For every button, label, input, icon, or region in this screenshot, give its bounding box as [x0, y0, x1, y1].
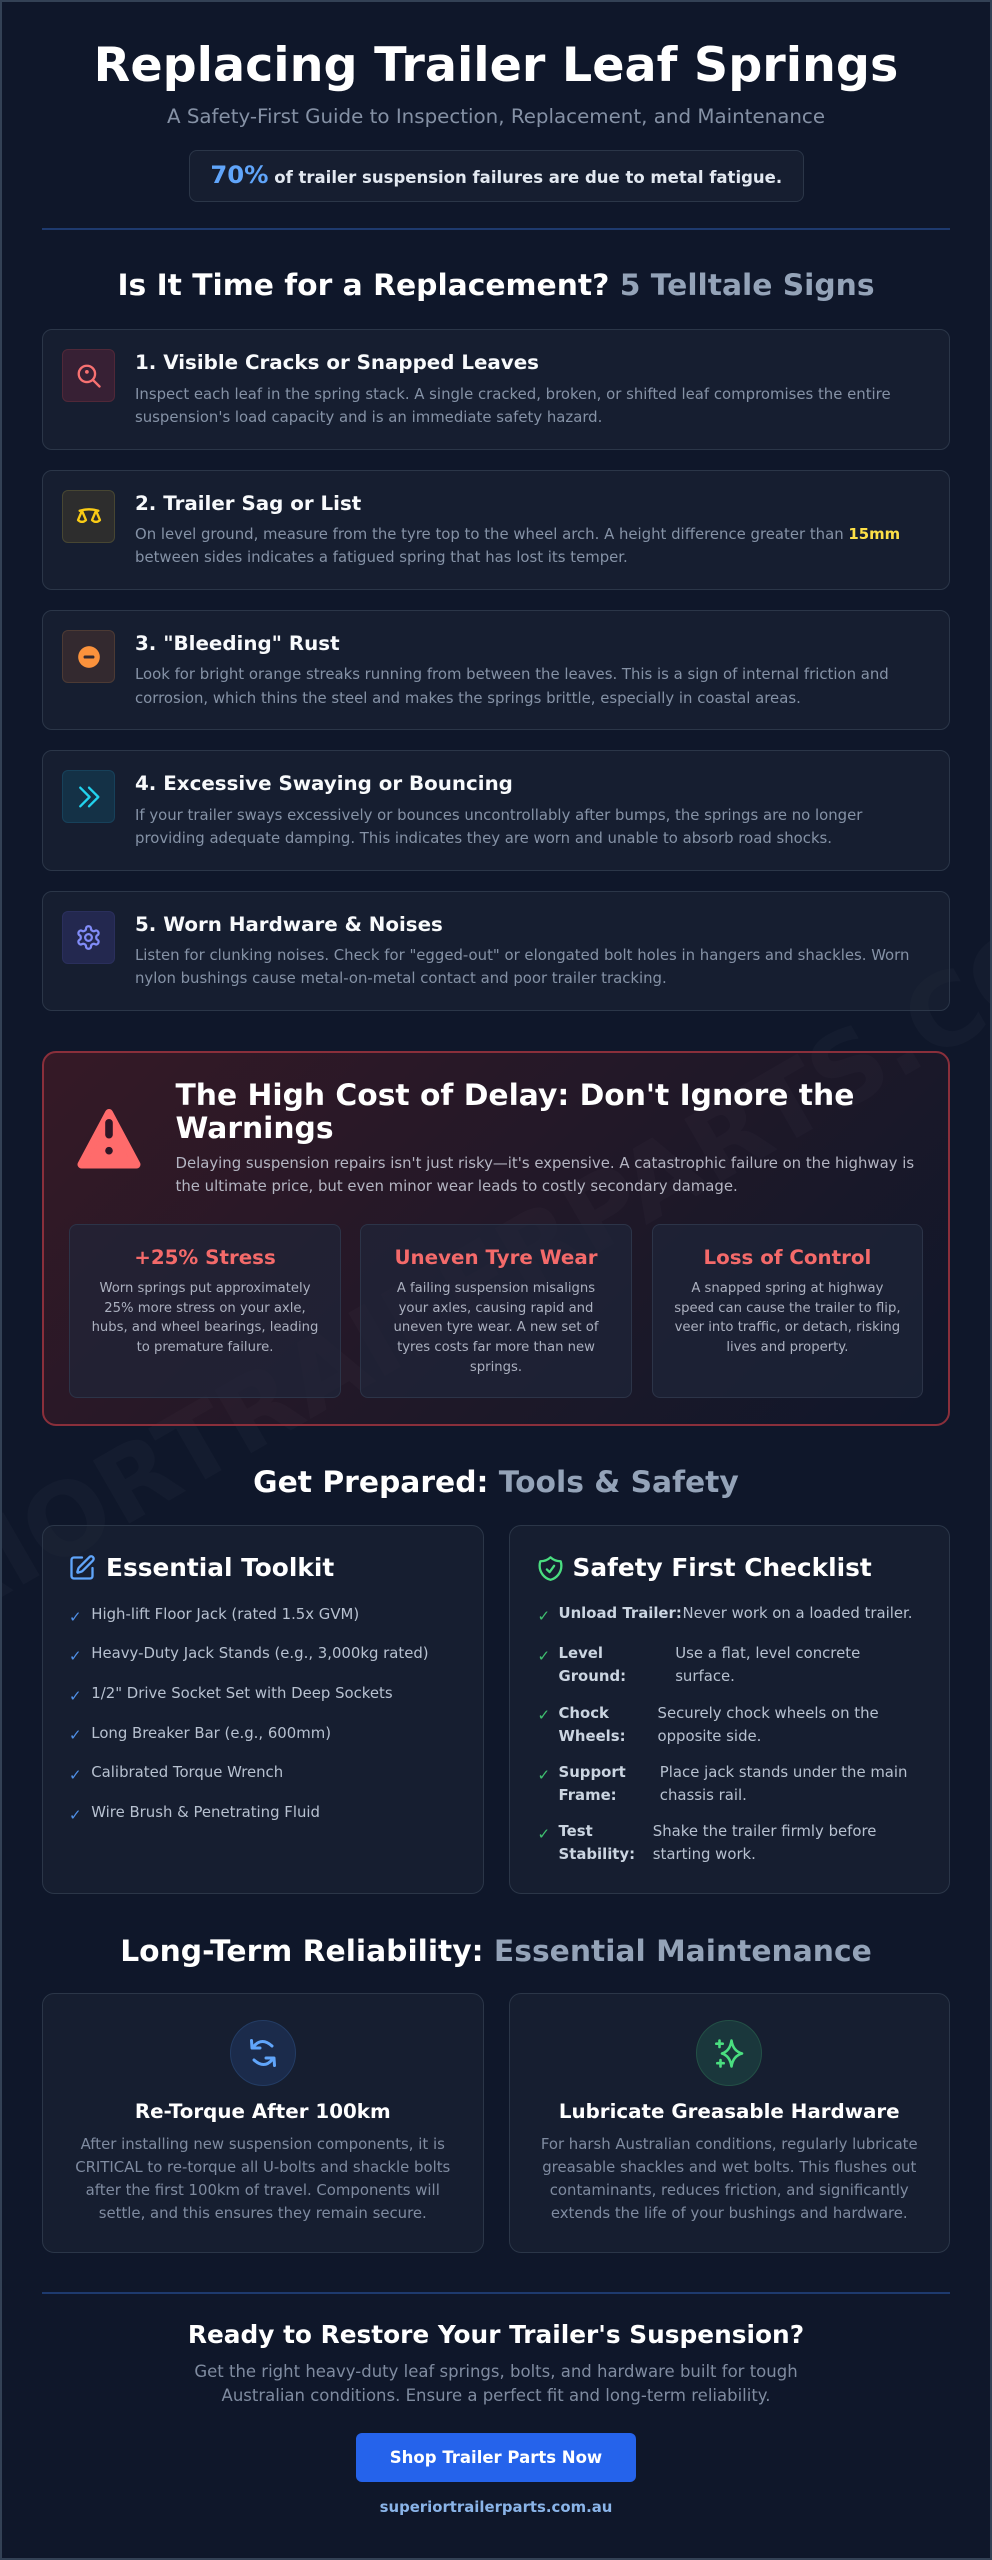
checklist: surface.	[675, 1667, 735, 1685]
panel: re-torque	[42, 1993, 484, 2253]
panel description	[176, 1154, 914, 1195]
card text: CRITICAL to re-torque all U-bolts and shackle bolts	[75, 2158, 450, 2176]
checklist: opposite side.	[658, 1727, 761, 1745]
toolkit list: 1/2" Drive Socket Set with Deep Sockets	[91, 1684, 393, 1702]
toolkit list: Calibrated Torque Wrench	[91, 1763, 283, 1781]
sign title: 4. Excessive Swaying or Bouncing	[135, 772, 513, 795]
card text	[541, 2135, 918, 2222]
heading: maintenance: Long-Term Reliability: Essential Maintenance	[120, 1934, 872, 1969]
card text: after the first 100km of travel. Components will	[86, 2181, 440, 2199]
sign 3	[42, 610, 950, 730]
sign description: nylon bushings cause metal-on-metal contact and poor trailer tracking.	[135, 969, 667, 987]
sign description: corrosion, which thins the steel and makes the springs brittle, especially in coastal areas.	[135, 689, 801, 707]
sign description: Inspect each leaf in the spring stack. A single cracked, broken, or shifted leaf compromises the entire	[135, 385, 891, 403]
icon: magnifier	[62, 349, 115, 402]
sign description	[135, 385, 891, 426]
sign description	[135, 946, 909, 987]
consequence: tyre wear	[360, 1224, 632, 1398]
checklist: Shake the trailer firmly before	[653, 1822, 876, 1840]
sign 4	[42, 750, 950, 871]
call to action	[188, 2320, 804, 2516]
consequence text: tyres costs far more than new	[397, 1340, 595, 1355]
card text: settle, and this ensures they remain secure.	[99, 2204, 427, 2222]
checklist: chassis rail.	[660, 1786, 747, 1804]
card text: greasable shackles and wet bolts. This flushes out	[542, 2158, 916, 2176]
sign title: 3. "Bleeding" Rust	[135, 632, 340, 655]
consequence title: Uneven Tyre Wear	[394, 1246, 598, 1269]
panel description: the ultimate price, but even minor wear leads to costly secondary damage.	[176, 1177, 738, 1195]
toolkit list: ✓	[69, 1806, 82, 1824]
checklist: Place jack stands under the main	[660, 1763, 908, 1781]
sign description: between sides indicates a fatigued spring that has lost its temper.	[135, 548, 628, 566]
sign description: Look for bright orange streaks running from between the leaves. This is a sign of internal friction and	[135, 665, 889, 683]
sign description	[135, 665, 889, 707]
sign description: suspension's load capacity and is an immediate safety hazard.	[135, 408, 602, 426]
sign description: Listen for clunking noises. Check for "egged-out" or elongated bolt holes in hangers and shackles. Worn	[135, 946, 909, 964]
consequence title: Loss of Control	[703, 1246, 871, 1269]
panel: high cost of delay	[42, 1051, 950, 1426]
consequence text: to premature failure.	[137, 1340, 273, 1355]
cta text: Get the right heavy-duty leaf springs, bolts, and hardware built for tough	[194, 2362, 798, 2381]
panel heading: The High Cost of Delay: Don't Ignore the	[176, 1078, 854, 1113]
consequence text: 25% more stress on your axle,	[104, 1301, 306, 1316]
toolkit list: Wire Brush & Penetrating Fluid	[91, 1803, 320, 1821]
toolkit list	[69, 1605, 429, 1824]
sign description: On level ground, measure from the tyre top to the wheel arch. A height difference greater than 15mm	[135, 525, 900, 543]
icon: gear	[62, 911, 115, 964]
card text: extends the life of your bushings and hardware.	[551, 2204, 908, 2222]
checklist: Securely chock wheels on the	[658, 1704, 879, 1722]
card text: For harsh Australian conditions, regularly lubricate	[541, 2135, 918, 2153]
panel: essential toolkit	[42, 1525, 484, 1894]
panel heading: Warnings	[176, 1111, 334, 1146]
checklist: ✓	[538, 1706, 550, 1724]
icon: shield check	[538, 1556, 562, 1581]
checklist: Use a flat, level concrete	[675, 1644, 860, 1662]
consequence text: uneven tyre wear. A new set of	[393, 1320, 598, 1335]
panel description: Delaying suspension repairs isn't just risky—it's expensive. A catastrophic failure on the highway is	[176, 1154, 914, 1172]
checklist: Ground:	[558, 1667, 626, 1685]
button	[356, 2433, 636, 2482]
toolkit list: ✓	[69, 1608, 82, 1626]
panel: safety checklist	[508, 1525, 950, 1894]
consequence text: your axles, causing rapid and	[399, 1301, 593, 1316]
consequence text: A snapped spring at highway	[691, 1281, 883, 1296]
sign 2	[42, 470, 950, 590]
checklist: Support	[558, 1763, 626, 1781]
consequence text: Worn springs put approximately	[99, 1281, 311, 1296]
sign description	[135, 525, 900, 566]
icon: sparkles	[696, 2020, 762, 2086]
toolkit list: ✓	[69, 1647, 82, 1665]
toolkit list: Long Breaker Bar (e.g., 600mm)	[91, 1724, 331, 1742]
checklist: Level	[558, 1644, 603, 1662]
toolkit list: High-lift Floor Jack (rated 1.5x GVM)	[91, 1605, 359, 1623]
heading: tools and safety: Get Prepared: Tools & Safety	[253, 1465, 739, 1500]
toolkit list: Heavy-Duty Jack Stands (e.g., 3,000kg rated)	[91, 1644, 429, 1662]
checklist: Test	[558, 1822, 593, 1840]
icon: scales	[62, 490, 115, 543]
checklist heading: Safety First Checklist	[572, 1553, 872, 1582]
toolkit list: ✓	[69, 1766, 82, 1784]
sign description: If your trailer sways excessively or bounces uncontrollably after bumps, the springs are no longer	[135, 806, 862, 824]
checklist: Chock	[558, 1704, 609, 1722]
checklist: ✓	[538, 1607, 550, 1625]
sign 5	[42, 891, 950, 1011]
consequence text: speed can cause the trailer to flip,	[674, 1301, 901, 1316]
icon: warning triangle	[78, 1109, 140, 1168]
sign title: 2. Trailer Sag or List	[135, 492, 361, 515]
checklist: Stability:	[558, 1845, 635, 1863]
sign title: 1. Visible Cracks or Snapped Leaves	[135, 351, 539, 374]
card text: After installing new suspension components, it is	[81, 2135, 445, 2153]
card title: Re-Torque After 100km	[135, 2100, 391, 2123]
checklist: ✓	[538, 1766, 550, 1784]
card text	[75, 2135, 450, 2222]
icon: refresh arrows	[230, 2020, 296, 2086]
sign description	[135, 806, 862, 847]
consequence text: A failing suspension misaligns	[397, 1281, 595, 1296]
toolkit list: ✓	[69, 1687, 82, 1705]
heading: telltale signs: Is It Time for a Replacement? 5 Telltale Signs	[117, 268, 875, 303]
consequence text: hubs, and wheel bearings, leading	[92, 1320, 318, 1335]
checklist: ✓	[538, 1647, 550, 1665]
title: Replacing Trailer Leaf Springs	[94, 38, 898, 92]
sign description: providing adequate damping. This indicates they are worn and unable to absorb road shocks.	[135, 829, 832, 847]
consequence title: +25% Stress	[134, 1246, 276, 1269]
cta text: Australian conditions. Ensure a perfect fit and long-term reliability.	[222, 2386, 770, 2405]
stat callout	[188, 150, 804, 202]
card text: contaminants, reduces friction, and significantly	[550, 2181, 909, 2199]
panel heading	[176, 1078, 854, 1146]
icon: chevrons	[62, 770, 115, 823]
website link: superiortrailerparts.com.au	[380, 2498, 612, 2516]
card title: Lubricate Greasable Hardware	[559, 2100, 900, 2123]
sign 1	[42, 329, 950, 450]
checklist: Unload Trailer:	[558, 1604, 682, 1622]
toolkit list: ✓	[69, 1726, 82, 1744]
cta text	[194, 2362, 798, 2405]
consequence text	[674, 1281, 901, 1355]
consequence text	[92, 1281, 318, 1355]
consequence: loss of control	[652, 1224, 923, 1398]
checklist: starting work.	[653, 1845, 756, 1863]
icon: pen square	[70, 1555, 95, 1580]
consequence: stress	[69, 1224, 341, 1398]
checklist: Never work on a loaded trailer.	[682, 1604, 912, 1622]
checklist	[538, 1604, 912, 1863]
header	[94, 38, 898, 202]
toolkit heading: Essential Toolkit	[106, 1553, 334, 1582]
checklist: Frame:	[558, 1786, 617, 1804]
subtitle: A Safety-First Guide to Inspection, Replacement, and Maintenance	[167, 105, 825, 128]
checklist: Wheels:	[558, 1727, 626, 1745]
cta heading: Ready to Restore Your Trailer's Suspension?	[188, 2320, 804, 2349]
consequence text: lives and property.	[726, 1340, 848, 1355]
button: Shop Trailer Parts Now	[390, 2448, 602, 2467]
icon: minus circle	[62, 630, 115, 683]
panel: lubricate	[508, 1993, 950, 2253]
consequence text	[393, 1281, 599, 1375]
sign title: 5. Worn Hardware & Noises	[135, 913, 443, 936]
stat text: 70% of trailer suspension failures are due to metal fatigue.	[210, 160, 782, 189]
checklist: ✓	[538, 1825, 550, 1843]
consequence text: springs.	[470, 1360, 522, 1375]
consequence text: veer into traffic, or detach, risking	[675, 1320, 900, 1335]
